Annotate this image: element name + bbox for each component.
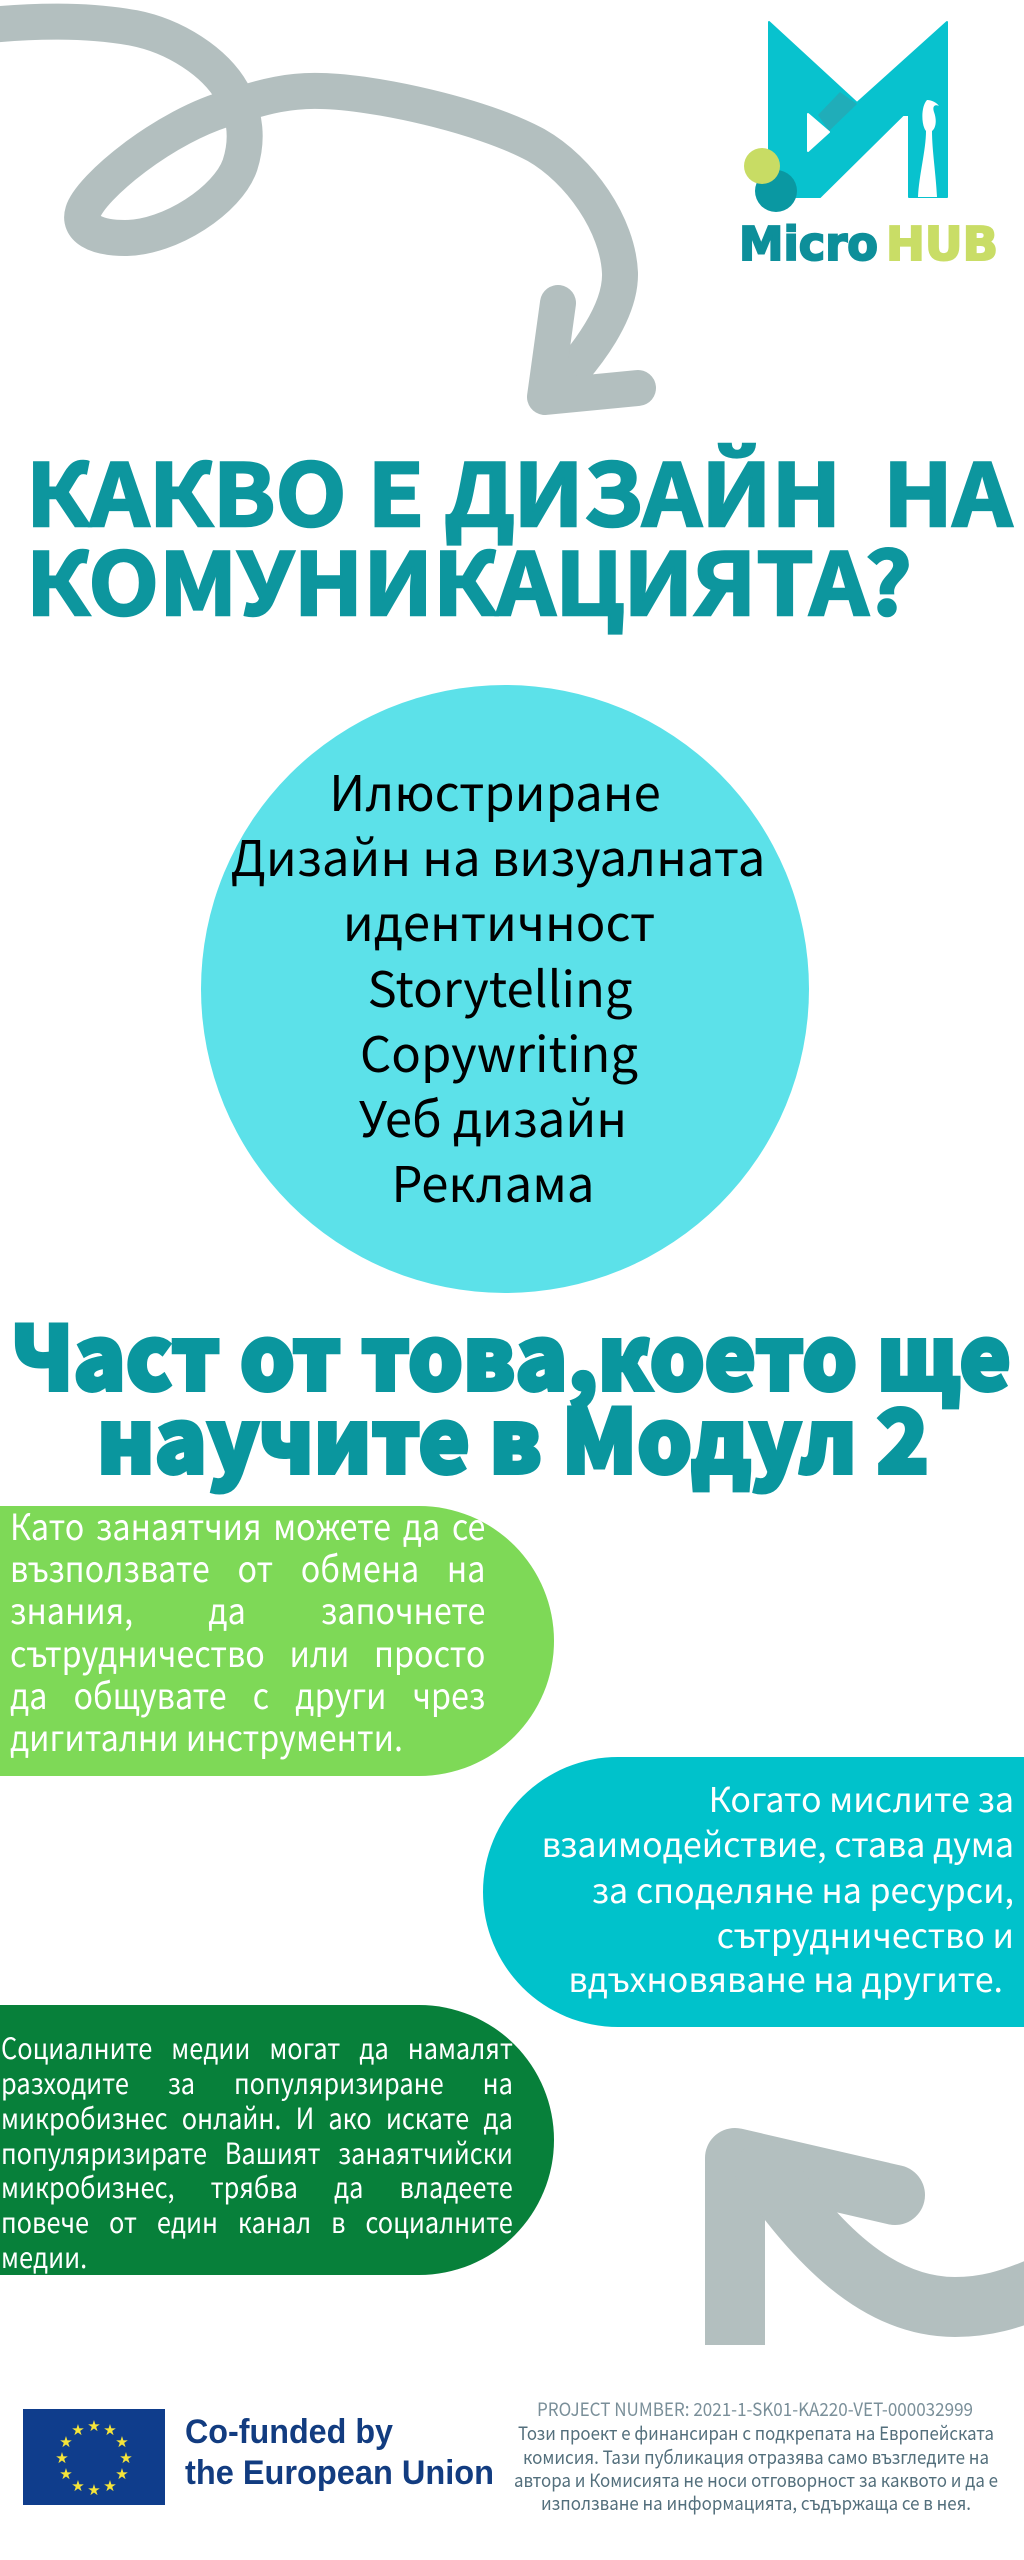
logo mark: M shape bbox=[769, 22, 947, 197]
text: social media: разходите за популяризиране на bbox=[1, 2061, 513, 2103]
panel: social media bbox=[0, 2005, 554, 2275]
footer: EU flag: ★ bbox=[59, 2433, 73, 2451]
text: craftsperson exchange bbox=[10, 1499, 485, 1762]
text: social media: медии. bbox=[1, 2235, 87, 2277]
decorative arrow: bottom curl bbox=[705, 2128, 1024, 2345]
text: craftsperson exchange: сътрудничество или просто bbox=[10, 1626, 485, 1678]
footer: project disclaimer bbox=[514, 2396, 998, 2516]
footer: co-funded text: Co-funded by bbox=[185, 2413, 393, 2451]
text: social media: микробизнес, трябва да владеете bbox=[1, 2165, 513, 2207]
text: interaction: за споделяне на ресурси, bbox=[592, 1864, 1014, 1913]
footer: EU flag: ★ bbox=[55, 2449, 69, 2467]
footer: EU flag: ★ bbox=[103, 2477, 117, 2495]
text: social media bbox=[1, 2026, 513, 2277]
panel: circle with disciplines list: Реклама bbox=[392, 1146, 594, 1217]
logo mark: dark band bbox=[818, 92, 857, 131]
heading: module 2: научите в Модул 2 bbox=[97, 1372, 929, 1499]
footer: EU flag: ★ bbox=[115, 2465, 129, 2483]
text: craftsperson exchange: възползвате от обмена на bbox=[10, 1541, 485, 1593]
text: interaction: Когато мислите за bbox=[709, 1773, 1014, 1822]
footer: EU flag: ★ bbox=[115, 2433, 129, 2451]
panel: circle with disciplines list: Уеб дизайн bbox=[359, 1081, 627, 1152]
logo mark: dark circle bbox=[755, 170, 797, 212]
footer: project disclaimer: използване на информацията, съдържаща се в нея. bbox=[541, 2490, 971, 2516]
text: social media: микробизнес онлайн. И ако искате да bbox=[1, 2096, 513, 2138]
footer: co-funded text bbox=[185, 2413, 494, 2492]
heading: module 2 bbox=[11, 1300, 1011, 1499]
logo: MicroHUB bbox=[739, 21, 998, 271]
logo mark: lime circle bbox=[744, 148, 780, 184]
text: interaction: сътрудничество и bbox=[717, 1909, 1014, 1958]
text: social media: Социалните медии могат да намалят bbox=[1, 2026, 513, 2068]
decorative arrow: top curl bbox=[0, 4, 656, 415]
title: КОМУНИКАЦИЯТА? bbox=[26, 515, 912, 640]
panel: circle with disciplines list: Дизайн на визуалната bbox=[231, 820, 765, 891]
panel: circle with disciplines list: Copywriting bbox=[360, 1016, 638, 1087]
logo wordmark: Micro: Micro bbox=[739, 217, 878, 271]
text: interaction: вдъхновяване на другите. bbox=[568, 1953, 1003, 2002]
panel: circle with disciplines list: Илюстриране bbox=[329, 755, 661, 826]
footer: EU flag: ★ bbox=[103, 2421, 117, 2439]
footer: EU flag: ★ bbox=[71, 2421, 85, 2439]
footer: EU flag: ★ bbox=[71, 2477, 85, 2495]
panel: circle with disciplines list: идентичност bbox=[343, 885, 655, 956]
footer: EU flag: ★ bbox=[87, 2417, 101, 2435]
footer: EU flag bbox=[23, 2409, 165, 2505]
footer: project disclaimer: комисия. Тази публикация отразява само възгледите на bbox=[523, 2444, 989, 2470]
text: interaction bbox=[542, 1773, 1014, 2002]
logo mark: play triangle bbox=[808, 114, 829, 151]
footer: project disclaimer: PROJECT NUMBER: 2021-1-SK01-KA220-VET-000032999 bbox=[537, 2396, 973, 2422]
text: craftsperson exchange: знания, да започнете bbox=[10, 1583, 485, 1635]
text: social media: повече от един канал в социалните bbox=[1, 2200, 513, 2242]
panel: circle with disciplines list bbox=[201, 685, 809, 1293]
panel: interaction bbox=[483, 1757, 1024, 2027]
footer: co-funded text: the European Union bbox=[185, 2454, 494, 2492]
text: craftsperson exchange: дигитални инструменти. bbox=[10, 1710, 403, 1762]
text: craftsperson exchange: Като занаятчия можете да се bbox=[10, 1499, 485, 1551]
text: interaction: взаимодействие, става дума bbox=[542, 1818, 1014, 1867]
title bbox=[26, 440, 1014, 640]
logo wordmark: HUB: HUB bbox=[886, 217, 998, 271]
footer: EU flag: ★ bbox=[119, 2449, 133, 2467]
text: social media: популяризирате Вашият занаятчийски bbox=[1, 2131, 513, 2173]
logo mark: brush bbox=[918, 100, 939, 197]
footer: EU flag: ★ bbox=[87, 2481, 101, 2499]
panel: craftsperson exchange bbox=[0, 1506, 554, 1776]
footer: EU flag: ★ bbox=[59, 2465, 73, 2483]
text: craftsperson exchange: да общувате с други чрез bbox=[10, 1668, 485, 1720]
panel: circle with disciplines list: Storytelling bbox=[368, 951, 632, 1022]
